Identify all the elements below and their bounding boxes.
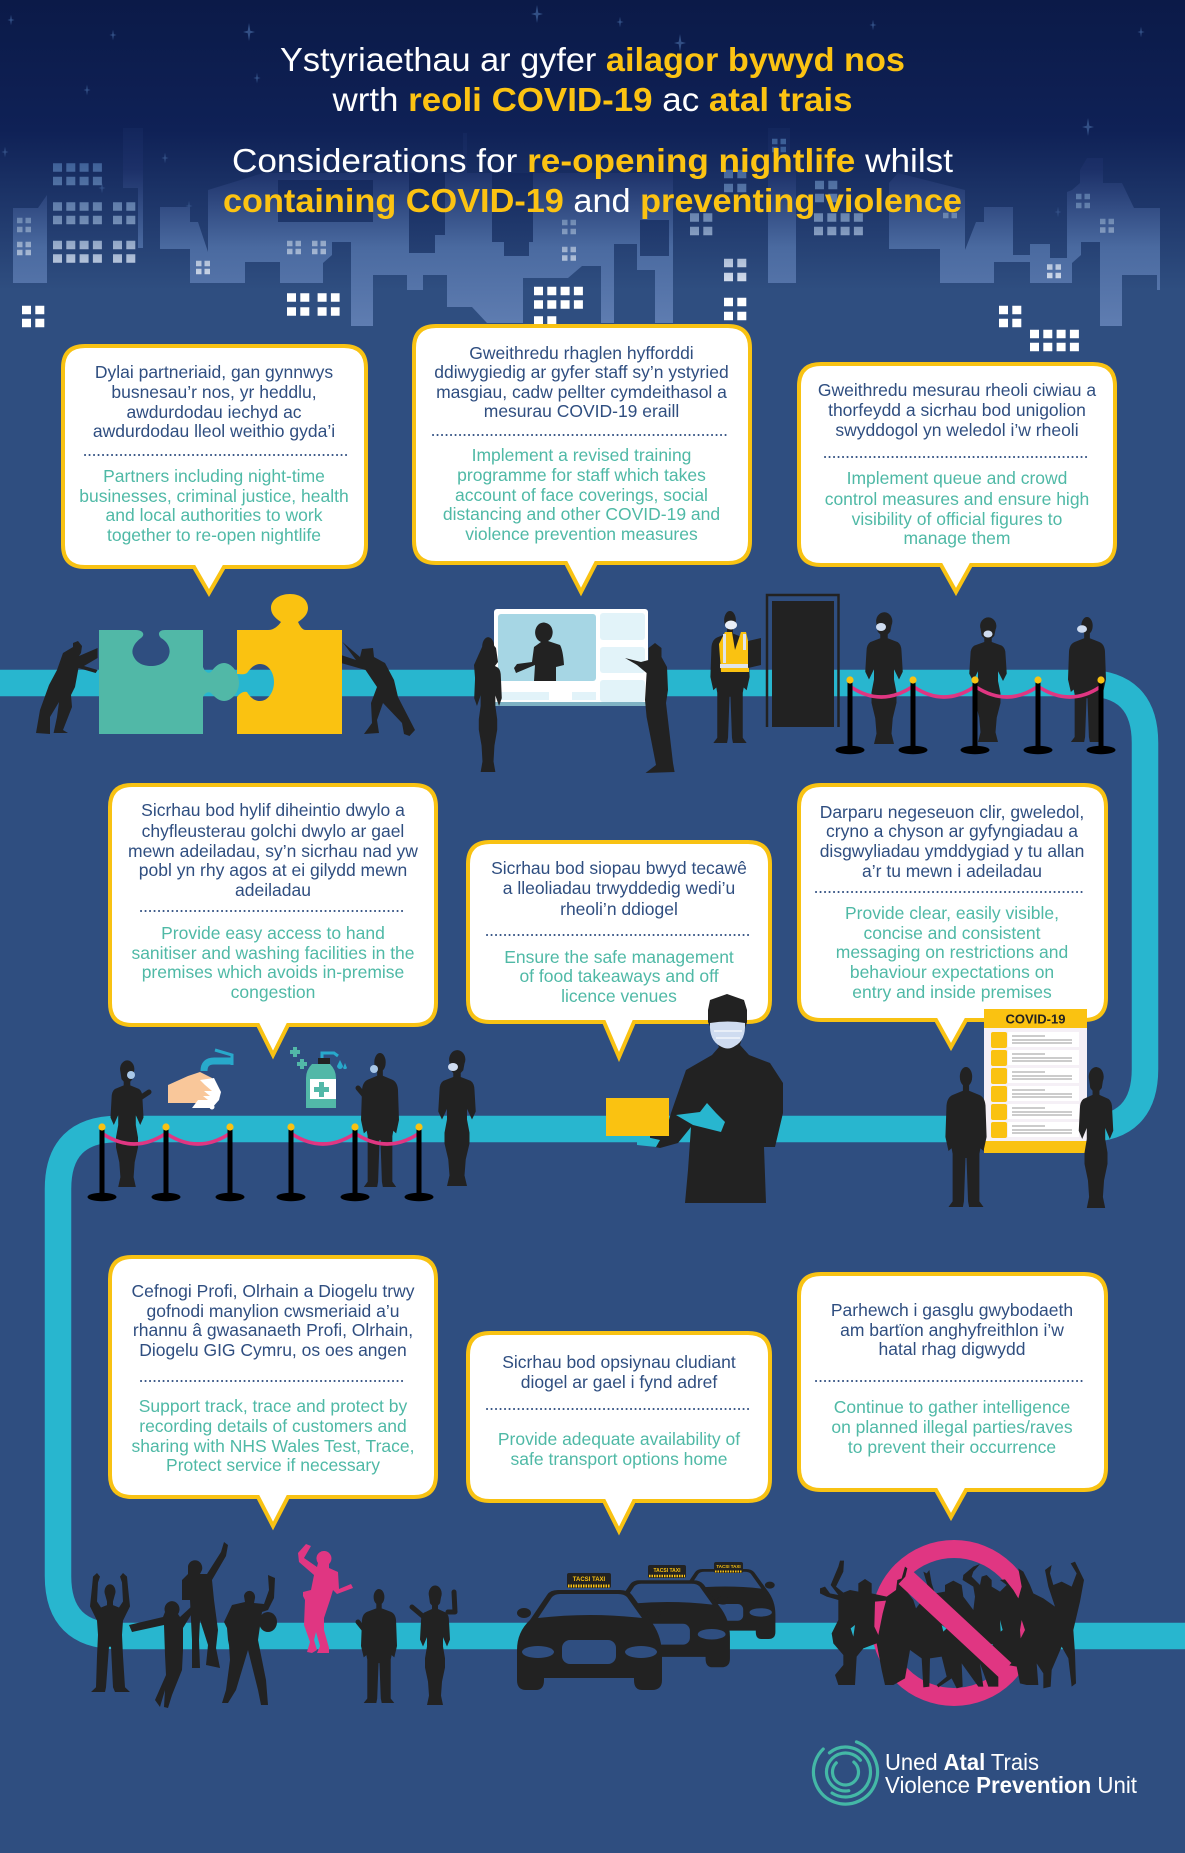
callout: clear messaging: Darparu negeseuon clir, gweledol, — [820, 802, 1084, 822]
callout: clear messaging: Provide clear, easily visible, — [845, 903, 1059, 923]
icon: takeaway worker with mask, gloves and food box — [606, 994, 783, 1203]
callout: hand sanitiser: pobl yn rhy agos at ei gilydd mewn — [139, 860, 407, 880]
callout: safe transport: safe transport options home — [511, 1449, 727, 1469]
callout: test trace protect: gofnodi manylion cwsmeriaid a’u — [147, 1301, 399, 1321]
icon: three taxis: TACSI TAXI — [653, 1568, 681, 1574]
icon: people queuing with hand washing and sanitiser — [88, 1050, 476, 1201]
callout: training: mesurau COVID-19 eraill — [484, 401, 679, 421]
callout: test trace protect: Cefnogi Profi, Olrhain a Diogelu trwy — [131, 1281, 415, 1301]
callout: test trace protect: Protect service if necessary — [166, 1455, 380, 1475]
title: Welsh and English: containing COVID-19 and preventing violence — [223, 182, 962, 219]
callout: training: programme for staff which takes — [457, 465, 706, 485]
callout: safe transport: diogel ar gael i fynd adref — [521, 1372, 717, 1392]
callout: training: ddiwygiedig ar gyfer staff sy’n ystyried — [434, 362, 729, 382]
callout: hand sanitiser: adeiladau — [235, 880, 311, 900]
icon: queue of masked people behind rope barrier — [836, 612, 1116, 754]
callout: clear messaging: a’r tu mewn i adeiladau — [862, 861, 1042, 881]
callout: food takeaways — [468, 842, 770, 1057]
callout: food takeaways: licence venues — [561, 986, 677, 1006]
callout: test trace protect: recording details of customers and — [139, 1416, 407, 1436]
city skyline — [13, 128, 1160, 347]
callout: hand sanitiser: sanitiser and washing facilities in the — [131, 943, 415, 963]
title: Welsh and English: Considerations for re-opening nightlife whilst — [232, 142, 953, 179]
icon: puzzle pieces with two people pushing — [36, 594, 415, 736]
icon: three taxis — [517, 1562, 775, 1690]
callout: queue control: control measures and ensure high — [825, 489, 1089, 509]
callout: queue control: visibility of official figures to — [852, 509, 1062, 529]
callout: food takeaways: a lleoliadau trwyddedig wedi’u — [503, 878, 735, 898]
callout: queue control: Implement queue and crowd — [847, 468, 1067, 488]
logo: Violence Prevention Unit — [804, 1731, 1138, 1813]
callout: training — [414, 326, 750, 592]
callout: food takeaways: Ensure the safe management — [504, 947, 734, 967]
title: Welsh and English — [223, 41, 962, 219]
icon: three taxis: TACSI TAXI — [716, 1564, 741, 1569]
title: Welsh and English: wrth reoli COVID-19 ac atal trais — [331, 81, 852, 118]
callout: clear messaging: entry and inside premises — [852, 982, 1052, 1002]
callout: safe transport — [468, 1333, 770, 1531]
callout: food takeaways: rheoli’n ddiogel — [560, 899, 678, 919]
icon: doorway — [767, 595, 838, 727]
callout: hand sanitiser — [110, 785, 436, 1055]
callout: clear messaging: behaviour expectations on — [850, 962, 1054, 982]
callout: clear messaging — [799, 785, 1106, 1047]
callout: queue control: Gweithredu mesurau rheoli ciwiau a — [818, 380, 1096, 400]
callout: test trace protect: Support track, trace and protect by — [139, 1396, 407, 1416]
callout: queue control: thorfeydd a sicrhau bod unigolion — [828, 400, 1086, 420]
callout: hand sanitiser: mewn adeiladau, sy’n sicrhau nad yw — [128, 841, 418, 861]
callout: training: Implement a revised training — [472, 445, 691, 465]
callout: partners: Partners including night-time — [103, 466, 325, 486]
title: Welsh and English: Ystyriaethau ar gyfer ailagor bywyd nos — [280, 41, 905, 78]
icon: steward in hi-vis vest — [710, 611, 761, 743]
icon: COVID-19 poster with two viewers: COVID-19 — [1006, 1012, 1065, 1026]
callout: illegal parties: to prevent their occurrence — [848, 1437, 1056, 1457]
night sky stars — [1, 5, 1145, 217]
callout: clear messaging: cryno a chyson ar gyfyngiadau a — [826, 821, 1078, 841]
icon: people dancing in a group — [90, 1542, 455, 1708]
callout: training: account of face coverings, social — [455, 485, 708, 505]
callout: clear messaging: messaging on restrictions and — [836, 942, 1068, 962]
callout: queue control — [799, 364, 1115, 592]
callout: illegal parties: Continue to gather intelligence — [834, 1397, 1070, 1417]
callout: partners — [63, 346, 366, 593]
callout: training: masgiau, cadw pellter cymdeithasol a — [436, 382, 727, 402]
icon: COVID-19 poster with two viewers — [945, 1009, 1113, 1208]
callout: hand sanitiser: Sicrhau bod hylif diheintio dwylo a — [141, 800, 405, 820]
callout: food takeaways: of food takeaways and off — [519, 966, 719, 986]
callout: illegal parties — [799, 1274, 1106, 1517]
callout: test trace protect: sharing with NHS Wales Test, Trace, — [131, 1436, 415, 1456]
callout: safe transport: Provide adequate availability of — [498, 1429, 740, 1449]
callout: test trace protect: Diogelu GIG Cymru, os oes angen — [139, 1340, 407, 1360]
callout: partners: together to re-open nightlife — [107, 525, 321, 545]
callout: queue control: manage them — [903, 528, 1011, 548]
callout: illegal parties: on planned illegal parties/raves — [831, 1417, 1073, 1437]
callout: partners: busnesau’r nos, yr heddlu, — [111, 382, 317, 402]
callout: partners: awdurdodau iechyd ac — [126, 402, 302, 422]
callout: food takeaways: Sicrhau bod siopau bwyd tecawê — [491, 858, 747, 878]
callout: hand sanitiser: congestion — [231, 982, 315, 1002]
callout: partners: and local authorities to work — [106, 505, 323, 525]
icon: washing hands under tap — [168, 1050, 233, 1110]
callout: hand sanitiser: chyfleusterau golchi dwylo ar gael — [142, 821, 404, 841]
callout: test trace protect: rhannu â gwasanaeth Profi, Olrhain, — [133, 1320, 413, 1340]
callout: partners: awdurdodau lleol weithio gyda’i — [93, 421, 335, 441]
logo: Violence Prevention Unit: Uned Atal Trais — [885, 1749, 1039, 1775]
callout: clear messaging: disgwyliadau ymddygiad y tu allan — [820, 841, 1084, 861]
callout: training: violence prevention measures — [465, 524, 698, 544]
callout: hand sanitiser: premises which avoids in-premise — [142, 962, 404, 982]
icon: prohibited party crowd — [820, 1549, 1084, 1697]
winding teal path — [0, 683, 1185, 1636]
callout: clear messaging: concise and consistent — [863, 923, 1041, 943]
callout: partners: Dylai partneriaid, gan gynnwys — [95, 362, 333, 382]
icon: training video screen with presenter and two staff — [474, 609, 675, 773]
callout: partners: businesses, criminal justice, health — [79, 486, 349, 506]
icon: hand sanitiser bottle — [290, 1047, 347, 1108]
callout: illegal parties: am bartïon anghyfreithlon i’w — [840, 1320, 1064, 1340]
icon: three taxis: TACSI TAXI — [573, 1577, 606, 1583]
callout: hand sanitiser: Provide easy access to hand — [161, 923, 385, 943]
callout: illegal parties: hatal rhag digwydd — [879, 1339, 1025, 1359]
callout: test trace protect — [110, 1257, 436, 1526]
callout: training: distancing and other COVID-19 and — [443, 504, 720, 524]
logo: Violence Prevention Unit: Violence Prevention Unit — [885, 1772, 1138, 1798]
callout: queue control: swyddogol yn weledol i’w rheoli — [835, 420, 1079, 440]
callout: safe transport: Sicrhau bod opsiynau cludiant — [502, 1352, 736, 1372]
callout: training: Gweithredu rhaglen hyfforddi — [469, 343, 694, 363]
callout: illegal parties: Parhewch i gasglu gwybodaeth — [831, 1300, 1073, 1320]
